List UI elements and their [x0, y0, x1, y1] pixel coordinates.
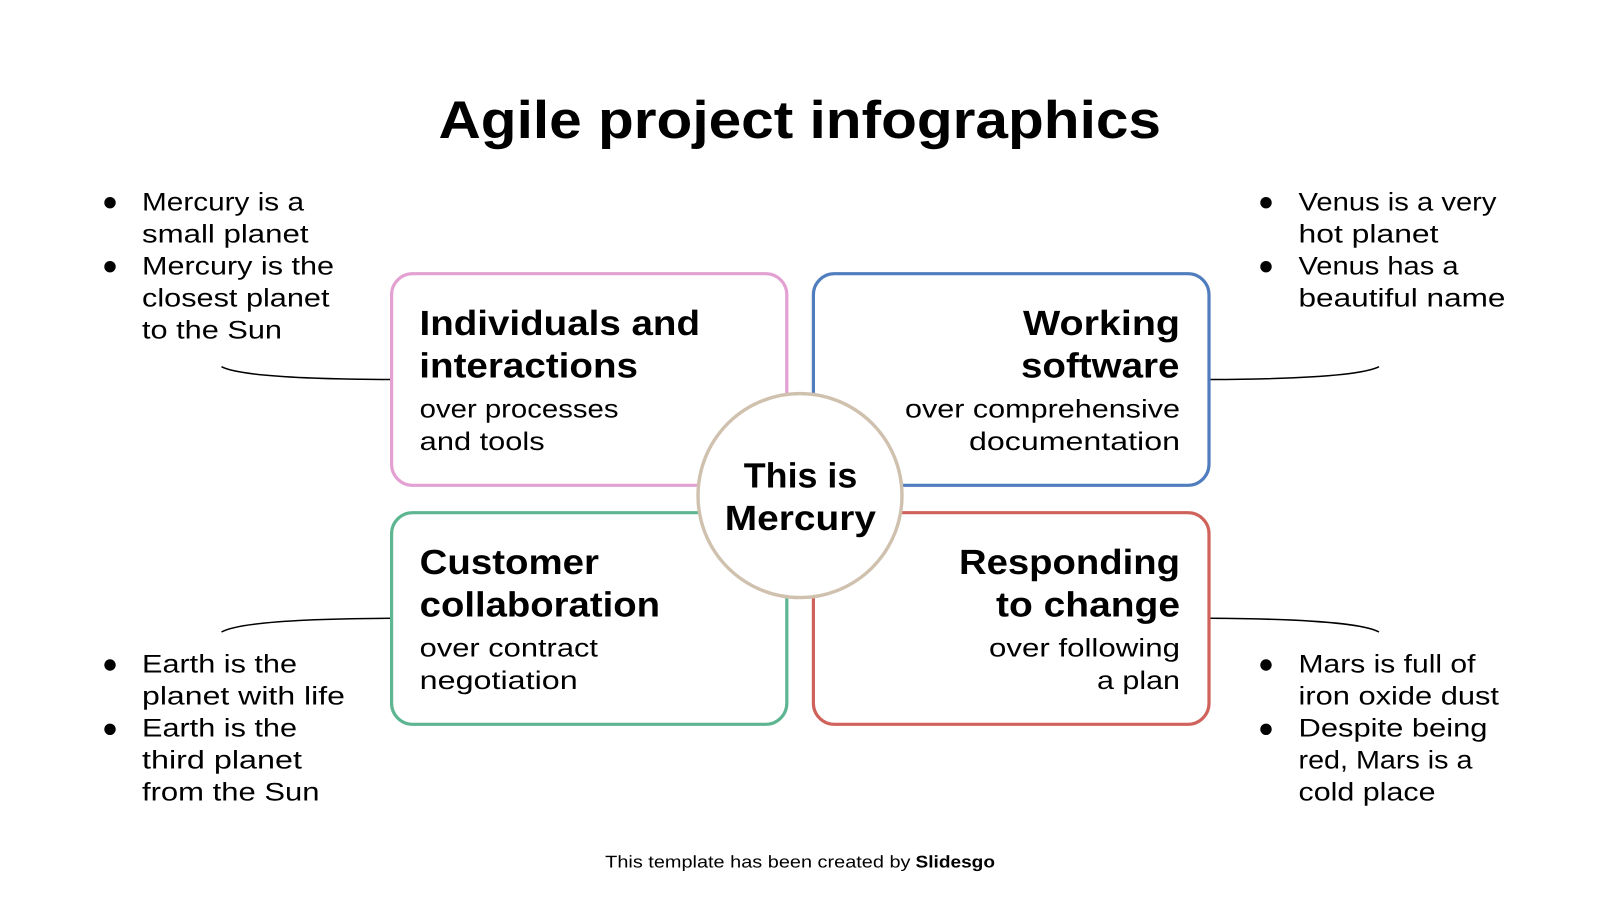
panel: Customer collaboration: over contract [420, 635, 598, 663]
center circle: This is Mercury: This is [744, 457, 857, 496]
footer credit: Slidesgo [916, 852, 995, 871]
text block: Mars notes: iron oxide dust [1298, 682, 1499, 710]
text block: Mercury notes: closest planet [142, 284, 330, 312]
panel: Working software: software [1021, 346, 1180, 386]
panel: Individuals and interactions [392, 274, 787, 485]
text block: Mars notes: red, Mars is a [1298, 746, 1473, 774]
text block: Mars notes [1260, 651, 1499, 806]
panel: Responding to change [813, 513, 1209, 724]
text block: Earth notes: Earth is the [142, 651, 297, 679]
center circle: This is Mercury [698, 394, 902, 598]
title: Agile project infographics [438, 91, 1161, 150]
panel: Responding to change: over following [989, 635, 1180, 663]
text block: Mars notes: Despite being [1298, 714, 1488, 742]
text block: Mercury notes [104, 189, 334, 344]
text block: Venus notes: beautiful name [1298, 284, 1506, 312]
text block: Venus notes: hot planet [1298, 220, 1438, 248]
text block: Mars notes: cold place [1298, 778, 1436, 806]
panel: Individuals and interactions: and tools [420, 428, 545, 456]
text block: Venus notes [1260, 189, 1506, 312]
text block: Mars notes: Mars is full of [1298, 651, 1477, 679]
text block: Earth notes: Earth is the [142, 714, 297, 742]
text block: Venus notes: Venus is a very [1298, 189, 1497, 217]
text block: Mercury notes: small planet [142, 220, 308, 248]
text block: Earth notes [104, 651, 345, 806]
panel: Responding to change: Responding [959, 543, 1180, 582]
connector: Earth notes to Customer card [222, 618, 392, 632]
connector: Mars notes to Responding card [1209, 618, 1379, 632]
text block: Earth notes: planet with life [142, 682, 345, 710]
text block: Mercury notes: Mercury is the [142, 252, 334, 280]
panel: Customer collaboration: collaboration [420, 586, 660, 625]
panel: Customer collaboration: negotiation [420, 667, 578, 695]
panel: Customer collaboration: Customer [420, 543, 599, 582]
footer credit: This template has been created by [605, 852, 911, 871]
panel: Individuals and interactions: over processes [420, 396, 618, 424]
panel: Individuals and interactions: Individuals and [420, 304, 700, 343]
text block: Earth notes: from the Sun [142, 778, 320, 806]
text block: Venus notes: Venus has a [1298, 252, 1459, 280]
footer credit [605, 852, 995, 871]
text block: Mercury notes: to the Sun [142, 316, 282, 344]
panel: Working software: Working [1023, 304, 1180, 343]
panel: Working software: over comprehensive [905, 396, 1180, 424]
panel: Individuals and interactions: interactions [419, 346, 638, 386]
panel: Responding to change: to change [996, 586, 1180, 625]
connector: Mercury notes to Individuals card [222, 367, 392, 380]
connector: Venus notes to Working software card [1209, 367, 1379, 380]
center circle: This is Mercury: Mercury [725, 499, 877, 538]
panel: Customer collaboration [392, 513, 787, 724]
text block: Earth notes: third planet [142, 746, 302, 774]
panel: Responding to change: a plan [1097, 667, 1180, 695]
panel: Working software [813, 274, 1209, 485]
text block: Mercury notes: Mercury is a [142, 189, 305, 217]
panel: Working software: documentation [969, 428, 1180, 456]
